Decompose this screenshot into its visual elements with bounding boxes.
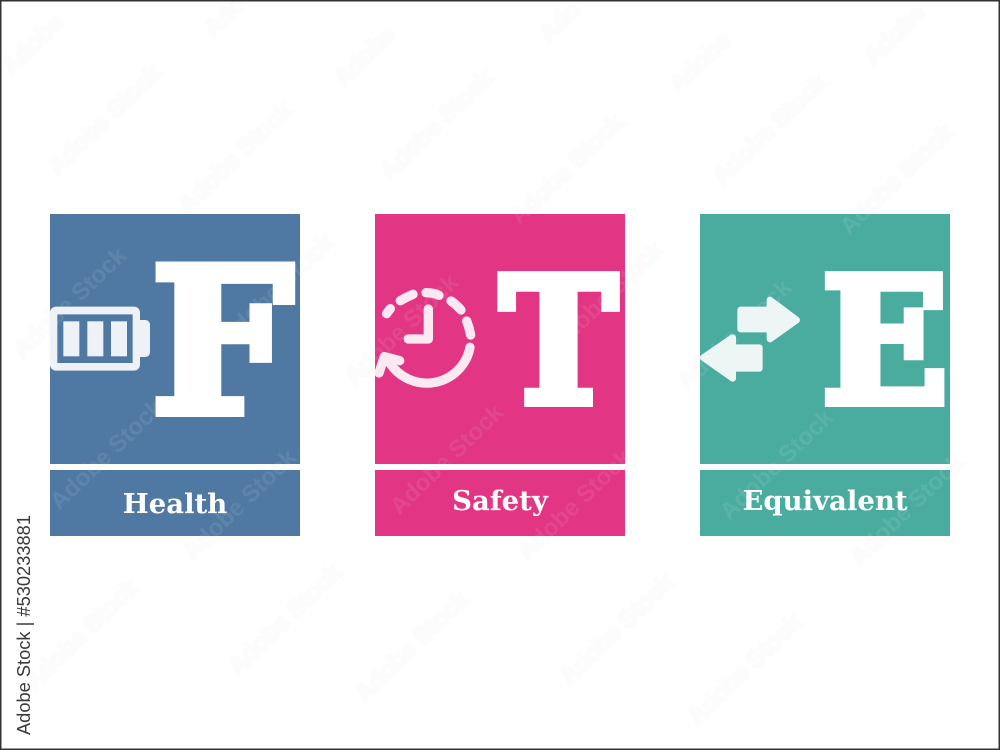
- letter E: E: [821, 240, 949, 444]
- watermark layer on panels: Adobe Stock: [178, 443, 302, 565]
- watermark layer on panels: Adobe Stock: [845, 448, 969, 570]
- left arrow: [703, 338, 759, 378]
- watermark layer on panels: Adobe Stock: [835, 118, 959, 240]
- battery bar 3: [111, 321, 127, 356]
- arrow head: [379, 357, 400, 373]
- watermark layer on panels: Adobe Stock: [715, 403, 839, 525]
- Equivalent label block: [700, 470, 950, 536]
- dashes: [387, 293, 471, 335]
- watermark layer on panels: Adobe Stock: [513, 443, 637, 565]
- watermark layer on panels: Adobe Stock: [173, 96, 297, 218]
- watermark layer on panels: Adobe Stock: [215, 228, 339, 350]
- panel: T / Safety: [375, 214, 625, 536]
- label: Health: Health: [123, 488, 227, 520]
- T main block: [375, 214, 625, 464]
- watermark layer on panels: Adobe Stock: [673, 273, 797, 395]
- panel: E / Equivalent: [700, 214, 950, 536]
- icon: clock with circular arrow: [379, 293, 471, 383]
- battery bar 2: [87, 321, 103, 356]
- watermark layer on panels: Adobe Stock: [8, 241, 132, 363]
- letter T: T: [500, 240, 617, 444]
- watermark layer on panels: [52, 214, 950, 536]
- watermark layer on panels: Adobe Stock: [340, 268, 464, 390]
- letter F: F: [151, 224, 293, 460]
- watermark layer on panels: Adobe Stock: [505, 108, 629, 230]
- panel: F / Health: [50, 214, 300, 536]
- clock hands: [408, 309, 428, 339]
- Health label block: [50, 470, 300, 536]
- watermark layer on panels: Adobe Stock: [45, 393, 169, 515]
- clock arc: [389, 347, 470, 383]
- icon: battery: [50, 307, 150, 371]
- icon: exchange arrows: [703, 300, 797, 378]
- Safety label block: [375, 470, 625, 536]
- stock id vertical text: Adobe Stock | #530233881: [14, 515, 34, 735]
- right arrow: [741, 300, 797, 339]
- label: Equivalent: Equivalent: [742, 485, 908, 517]
- watermark layer on panels: Adobe Stock: [545, 235, 669, 357]
- F main block: [50, 214, 300, 464]
- battery bar 1: [63, 321, 79, 356]
- watermark layer on panels: Adobe Stock: [385, 398, 509, 520]
- label: Safety: Safety: [452, 485, 549, 517]
- E main block: [700, 214, 950, 464]
